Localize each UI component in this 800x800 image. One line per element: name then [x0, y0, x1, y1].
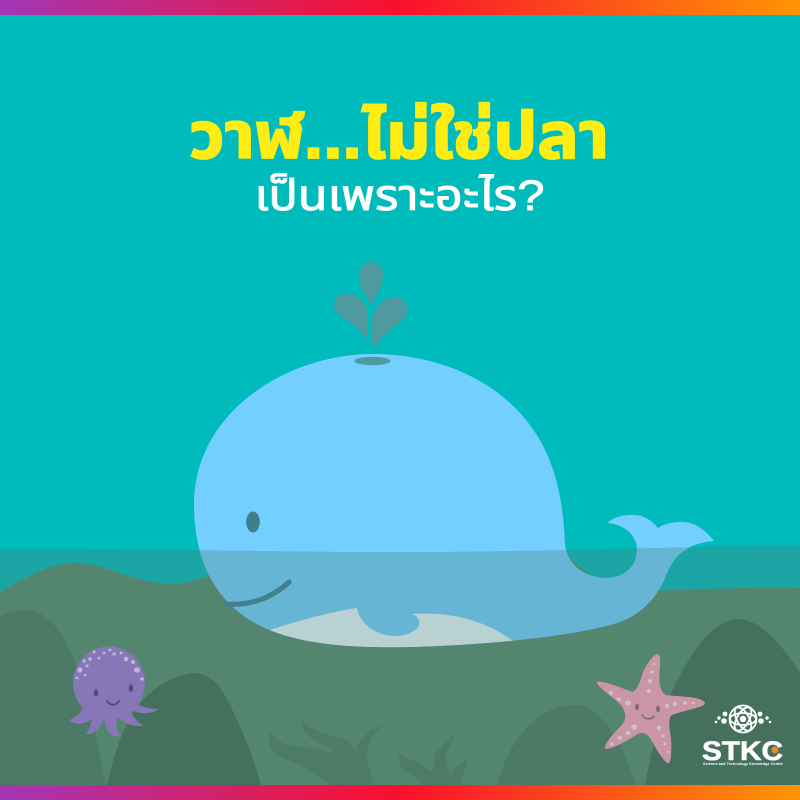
logo tagline: Science and Technology Knowledge Center: [703, 762, 784, 766]
drop: left: [334, 294, 368, 339]
whale eye: [246, 512, 260, 532]
water spout: [334, 262, 407, 349]
starfish mouth: [642, 715, 654, 719]
top gradient bar: [0, 0, 800, 15]
whale mouth: [226, 582, 289, 604]
whale body: [194, 354, 714, 647]
starfish body: [597, 654, 705, 763]
hill: middle right: [497, 705, 636, 785]
logo orange dot: [772, 747, 778, 753]
octopus tentacles: [69, 703, 159, 736]
hill: far left: [0, 610, 105, 785]
hill: right dark: [645, 619, 800, 785]
seaweed right: [398, 734, 468, 785]
drop: top: [359, 262, 383, 305]
logo atom icon: [730, 705, 756, 733]
starfish: [597, 654, 705, 763]
drop: right: [371, 297, 407, 349]
bottom gradient bar: [0, 785, 800, 800]
whale underwater tint: [200, 547, 690, 648]
logo: STKC: [702, 705, 784, 766]
octopus head: [73, 646, 145, 720]
octopus eyes: [94, 689, 98, 697]
octopus mouth: [107, 701, 119, 705]
seaweed left: [269, 720, 383, 785]
sea floor: [0, 558, 800, 800]
whale: [190, 354, 720, 660]
logo wordmark: STKC: [702, 736, 783, 766]
octopus spots: [75, 649, 144, 681]
title: วาฬ...ไม่ใช่ปลา: [189, 99, 609, 172]
subtitle: เป็นเพราะอะไร?: [254, 172, 544, 220]
logo dots: [715, 712, 771, 724]
starfish spots: [609, 663, 694, 753]
water band: [0, 545, 800, 640]
blowhole: [354, 357, 390, 365]
hill: left dark: [107, 673, 261, 785]
octopus: [69, 646, 159, 736]
starfish eyes: [635, 704, 639, 710]
whale belly: [270, 608, 512, 648]
